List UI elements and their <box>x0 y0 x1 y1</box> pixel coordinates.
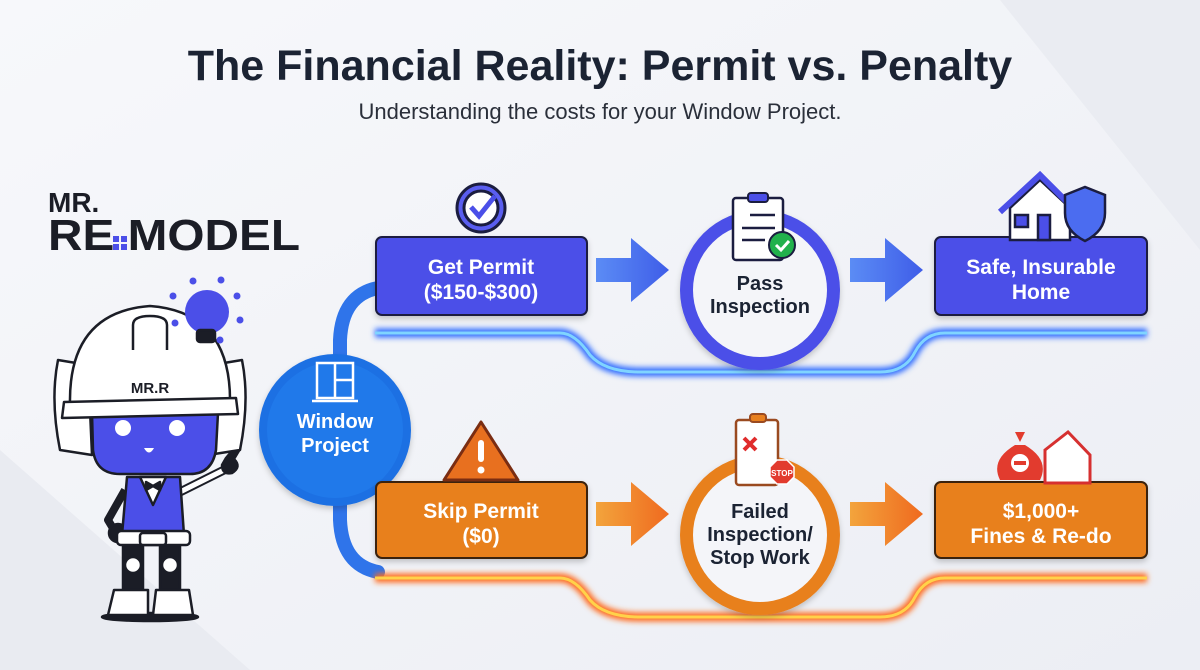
step: fines <box>935 482 1147 558</box>
arrow top 1 <box>596 238 669 302</box>
step: safe home <box>935 237 1147 315</box>
bottom neon line <box>375 578 1147 617</box>
step: pass inspection <box>680 193 840 370</box>
icon: house with shield <box>1000 175 1105 241</box>
icon: warning <box>444 422 518 480</box>
step: get permit: ($150-$300) <box>424 281 538 304</box>
top neon line <box>375 333 1147 372</box>
step: pass inspection: Pass <box>737 273 783 295</box>
connecting arc <box>340 288 378 572</box>
step: failed inspection: Inspection/ <box>707 524 813 546</box>
icon: check circle <box>457 184 505 232</box>
title: The Financial Reality: Permit vs. Penalty <box>188 42 1012 90</box>
arrow bottom 2 <box>850 482 923 546</box>
face <box>92 413 218 474</box>
step: skip permit: ($0) <box>462 525 500 548</box>
step: safe home: Home <box>1012 281 1070 304</box>
bulb <box>185 290 229 334</box>
arrow bottom 1 <box>596 482 669 546</box>
step: skip permit: Skip Permit <box>423 500 539 523</box>
logo: MR. <box>48 187 99 218</box>
arms <box>180 468 228 492</box>
legs <box>123 545 143 593</box>
mascot robot: MR.R <box>131 380 169 397</box>
step: failed inspection: STOP <box>771 469 793 478</box>
step: skip permit <box>376 482 587 558</box>
step: safe home: Safe, Insurable <box>966 256 1116 279</box>
mascot robot <box>54 276 246 621</box>
window project circle <box>259 354 411 506</box>
arrow top 2 <box>850 238 923 302</box>
helmet <box>70 306 230 405</box>
step: fines: Fines & Re-do <box>970 525 1112 548</box>
window project circle: Project <box>301 435 369 457</box>
step: get permit: Get Permit <box>428 256 534 279</box>
vest <box>122 477 184 535</box>
step: failed inspection: Stop Work <box>710 547 811 569</box>
logo <box>48 187 300 260</box>
step: failed inspection <box>680 414 840 615</box>
step: get permit <box>376 237 587 315</box>
subtitle: Understanding the costs for your Window Project. <box>358 99 842 124</box>
earmuffs <box>54 360 92 455</box>
step: failed inspection: Failed <box>731 501 789 523</box>
window project circle: Window <box>297 411 374 433</box>
step: fines: $1,000+ <box>1003 500 1079 523</box>
icon: money bag broken house <box>997 432 1090 483</box>
logo: RE MODEL <box>48 211 300 260</box>
step: pass inspection: Inspection <box>710 296 810 318</box>
